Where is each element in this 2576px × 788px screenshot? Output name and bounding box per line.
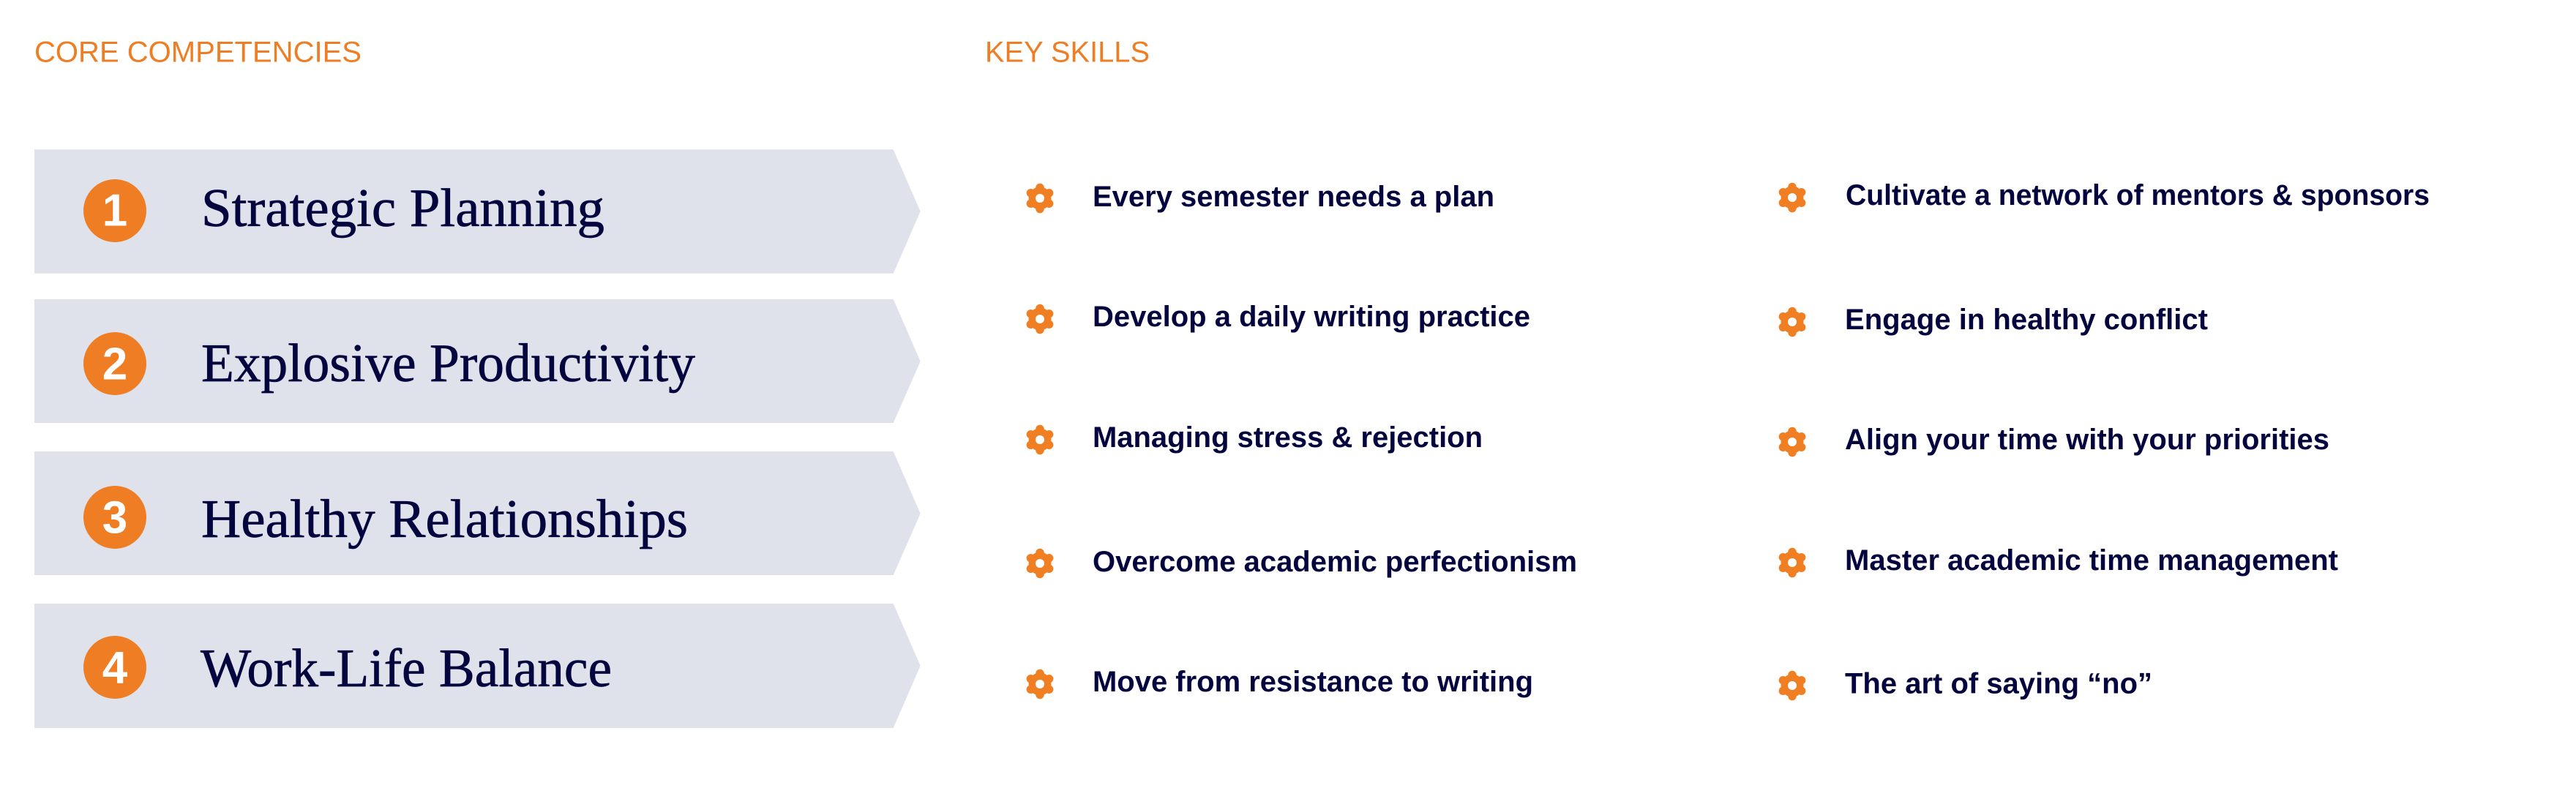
panel: healthy relationships chevron	[34, 451, 921, 575]
icon: number 1 badge	[83, 179, 146, 242]
label: work-life balance: Work-Life Balance	[201, 639, 612, 699]
icon: number 4 badge	[83, 636, 146, 699]
heading: core competencies: CORE COMPETENCIES	[34, 37, 362, 69]
skill: managing stress and rejection: Managing stress & rejection	[1093, 421, 1483, 454]
skill: align your time with your priorities: Align your time with your priorities	[1845, 424, 2329, 456]
skill: master academic time management: Master academic time management	[1845, 544, 2338, 577]
panel: explosive productivity chevron	[34, 299, 921, 423]
label: strategic planning: Strategic Planning	[201, 179, 604, 239]
heading: key skills: KEY SKILLS	[985, 37, 1150, 69]
icon: gear	[1781, 430, 1803, 454]
skill: overcome academic perfectionism: Overcome academic perfectionism	[1093, 546, 1577, 578]
skill: the art of saying no: The art of saying “no”	[1845, 667, 2152, 699]
icon: gear	[1781, 552, 1803, 574]
skill: move from resistance to writing: Move from resistance to writing	[1093, 666, 1533, 698]
panel: work-life balance chevron	[34, 604, 921, 728]
icon: number 3 badge	[83, 486, 146, 549]
icon: gear	[1781, 675, 1803, 697]
icon: gear	[1781, 310, 1803, 334]
icon: number 1 badge: 1	[102, 186, 127, 236]
skill: engage in healthy conflict: Engage in healthy conflict	[1845, 304, 2208, 336]
skill: every semester needs a plan: Every semester needs a plan	[1093, 181, 1494, 213]
label: healthy relationships: Healthy Relationships	[201, 489, 688, 549]
icon: gear	[1029, 673, 1051, 695]
icon: number 2 badge	[83, 332, 146, 395]
icon: gear	[1029, 552, 1051, 575]
icon: number 3 badge: 3	[102, 493, 127, 543]
icon: gear	[1781, 186, 1803, 209]
icon: number 4 badge: 4	[102, 642, 128, 694]
skill: cultivate a network of mentors and sponsors: Cultivate a network of mentors & sponsors	[1846, 179, 2430, 211]
panel: strategic planning chevron	[34, 149, 921, 274]
skill: develop a daily writing practice: Develop a daily writing practice	[1093, 301, 1530, 333]
icon: gear	[1029, 187, 1051, 209]
icon: number 2 badge: 2	[102, 339, 127, 389]
icon: gear	[1029, 429, 1051, 451]
icon: gear	[1029, 307, 1051, 331]
label: explosive productivity: Explosive Productivity	[201, 334, 695, 394]
